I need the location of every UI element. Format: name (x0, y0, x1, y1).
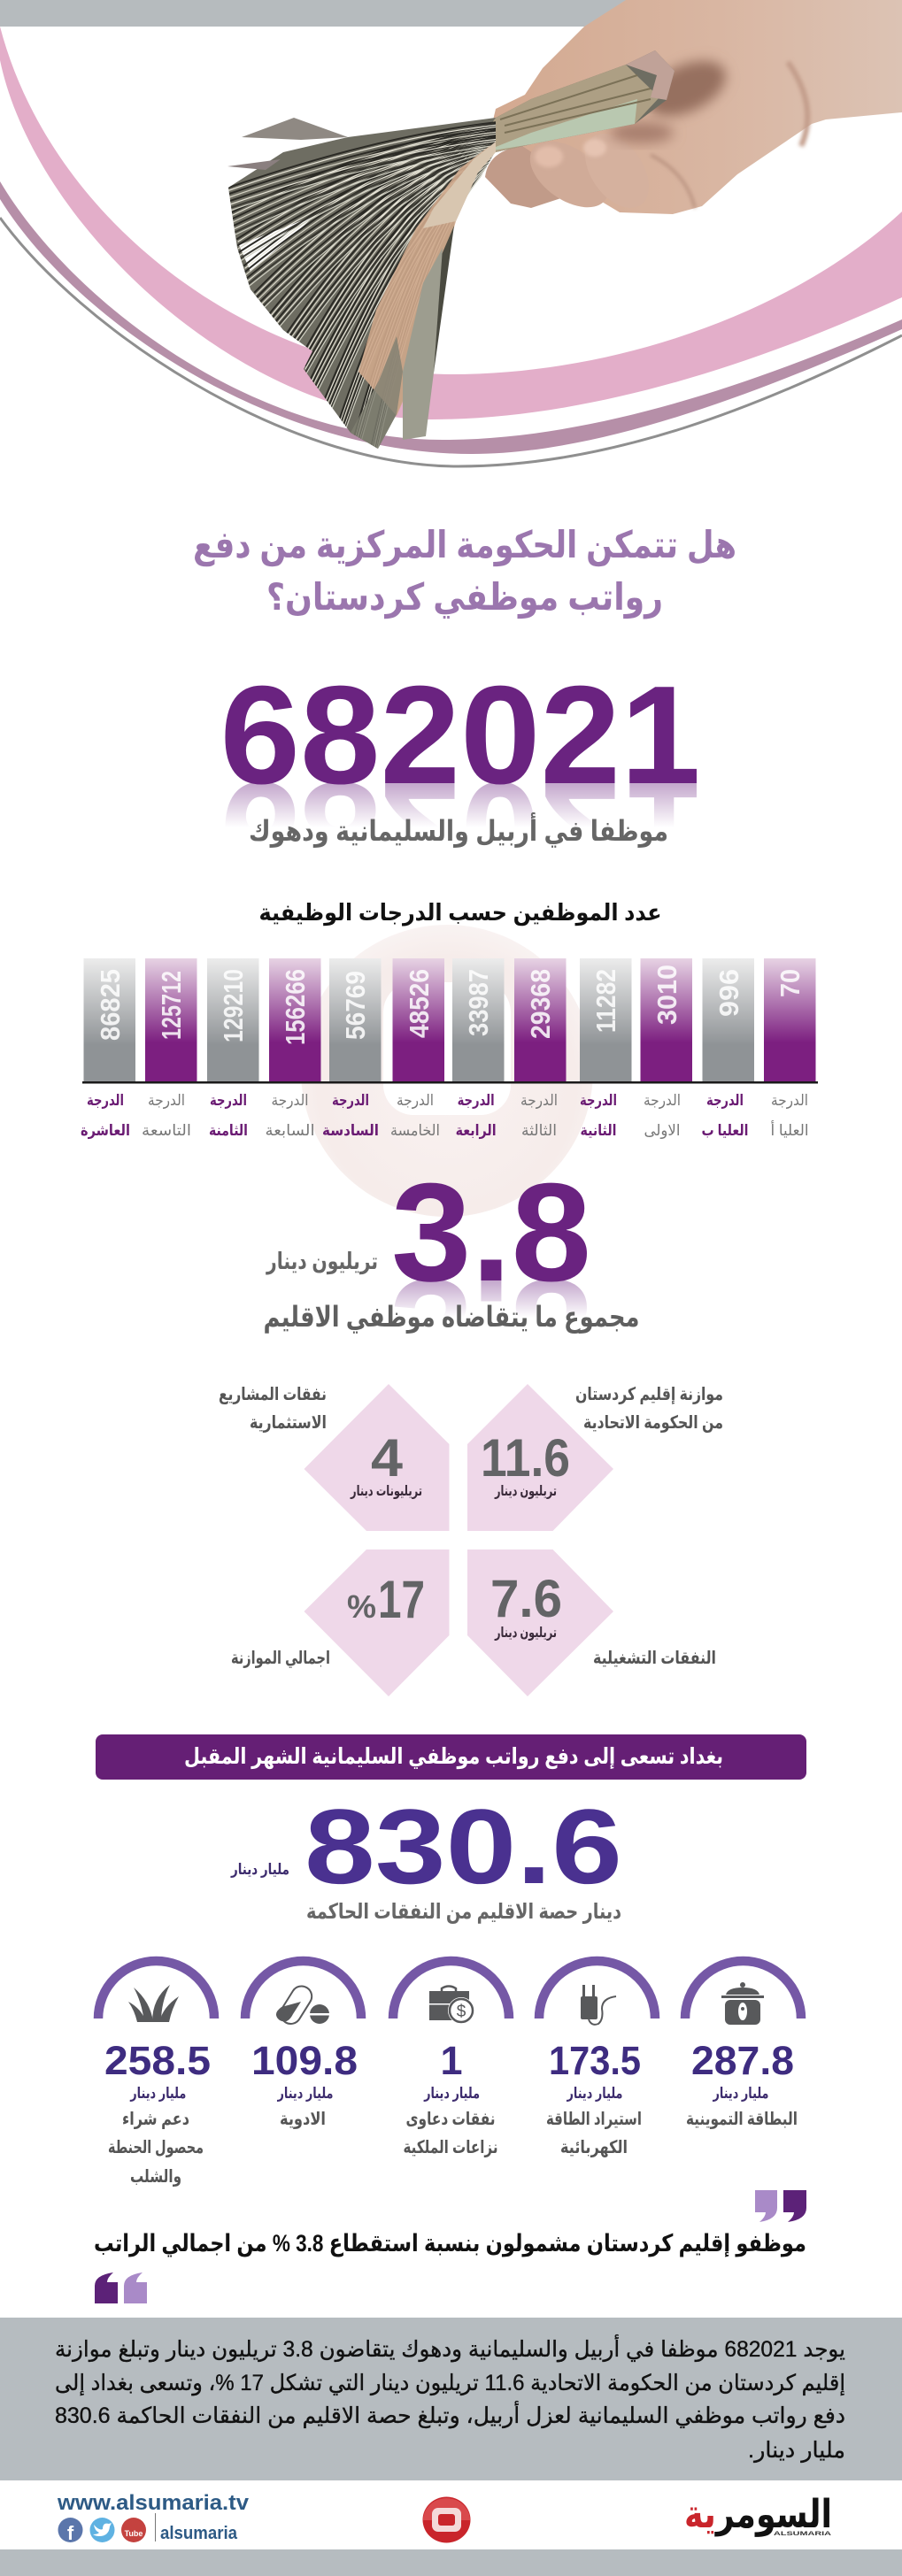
footer: website: www.alsumaria.tv (57, 2491, 250, 2515)
hand holding money (227, 0, 902, 467)
footer: social icons: alsumaria (160, 2524, 238, 2543)
watermark logo (301, 925, 593, 1217)
grade labels: الدرجة (644, 1092, 681, 1109)
footer: social icons (58, 2513, 238, 2544)
big number 682021 with reflection (220, 657, 701, 909)
grade labels: العاشرة (81, 1122, 130, 1140)
icon: money bag: $ (457, 2003, 466, 2021)
diamond: federal budget share: 11.6 (481, 1428, 570, 1488)
diamond: investment spending: تريليونات دينار (350, 1484, 422, 1499)
grade labels: العليا أ (770, 1120, 809, 1139)
bar chart: employees per grade: 86825 (95, 969, 126, 1041)
mauve curved band (0, 181, 902, 454)
item: property disputes: نزاعات الملكية (404, 2138, 497, 2157)
diamond: federal budget share: تريليون دينار (494, 1484, 557, 1499)
item: ration card: مليار دينار (713, 2085, 768, 2102)
title: رواتب موظفي كردستان؟ (266, 576, 663, 619)
subtitle: employees: موظفا في أربيل والسليمانية ودهوك (249, 812, 668, 848)
grade labels: الدرجة (87, 1092, 124, 1109)
item: wheat and barley: والشلب (130, 2167, 181, 2187)
footer: social icons: f (67, 2522, 74, 2544)
icon: money bag (429, 1986, 474, 2024)
bar chart: employees per grade: 11282 (590, 969, 621, 1033)
bar chart: employees per grade (82, 958, 818, 1083)
diamond: share of total budget: % (347, 1588, 376, 1625)
bar chart: employees per grade: 156266 (280, 969, 311, 1045)
footer: social icons: Tube (125, 2529, 143, 2538)
subtitle: total salaries: مجموع ما يتقاضاه موظفي الاقليم (264, 1301, 639, 1334)
diamond: share of total budget: 17 (378, 1570, 425, 1629)
bar chart: employees per grade: 56769 (340, 971, 371, 1040)
banner: Baghdad seeks to pay Sulaymaniyah salaries: بغداد تسعى إلى دفع رواتب موظفي السليمانية الشهر المقبل (184, 1744, 723, 1770)
item: ration card: 287.8 (691, 2038, 794, 2083)
grade labels: العليا ب (701, 1122, 749, 1139)
icon: closing quote marks (95, 2272, 147, 2303)
unit: billion dinars: مليار دينار (230, 1861, 289, 1878)
item: property disputes: مليار دينار (423, 2085, 480, 2102)
bar chart: employees per grade: 33987 (463, 969, 494, 1036)
grade labels: الاولى (644, 1122, 680, 1139)
item: medicine: 109.8 (251, 2038, 358, 2083)
big number 682021 with reflection: 682021 (220, 753, 701, 909)
grade labels: الدرجة (397, 1092, 434, 1109)
grade labels: الدرجة (271, 1092, 308, 1109)
quote: salary deduction: موظفو إقليم كردستان مشمولون بنسبة استقطاع 3.8 % من اجمالي الراتب (94, 2230, 806, 2257)
big number 3.8 with reflection: 3.8 (391, 1250, 591, 1406)
item: property disputes: نفقات دعاوى (405, 2110, 496, 2129)
item: electricity imports: 173.5 (549, 2038, 641, 2083)
grade labels: الدرجة (520, 1092, 558, 1109)
grade labels: الثالثة (521, 1122, 557, 1139)
item: medicine: الادوية (280, 2110, 326, 2129)
footer: Alsumaria wordmark: ALSUMARIA (774, 2531, 832, 2537)
item: wheat and barley: دعم شراء (122, 2110, 189, 2129)
grade labels: الدرجة (210, 1092, 247, 1109)
diamond: federal budget share (467, 1384, 613, 1531)
bar chart: employees per grade: 125712 (156, 971, 187, 1040)
grade labels: الدرجة (148, 1092, 185, 1109)
footer: red logo mark (423, 2497, 471, 2543)
bar chart: employees per grade: 70 (775, 969, 806, 997)
top grey bar (0, 0, 902, 27)
label: federal budget (575, 1385, 723, 1433)
item: electricity imports: الكهربائية (560, 2138, 628, 2157)
big number 830.6: 830.6 (305, 1788, 622, 1906)
grade labels: الرابعة (456, 1122, 497, 1140)
diamond: share of total budget (305, 1549, 450, 1696)
grade labels: السادسة (322, 1122, 379, 1139)
panel: summary paragraph (0, 2318, 902, 2480)
label: investment projects (219, 1385, 327, 1433)
label: federal budget: من الحكومة الاتحادية (583, 1413, 723, 1433)
bottom grey bar (0, 2549, 902, 2576)
subtitle: region's share of sovereign spending: دينار حصة الاقليم من النفقات الحاكمة (306, 1900, 621, 1924)
icon: cooking pot (721, 1982, 764, 2025)
grade labels: الدرجة (332, 1092, 369, 1109)
panel: summary paragraph: مليار دينار. (748, 2438, 845, 2463)
bar chart: employees per grade: 129210 (218, 969, 249, 1042)
item: electricity imports (539, 1961, 655, 2157)
bar chart: employees per grade: 996 (713, 969, 744, 1017)
money stack (227, 50, 675, 467)
diamond: operating spending (467, 1549, 613, 1696)
item: wheat and barley: مليار دينار (130, 2085, 186, 2102)
item: property disputes: 1 (440, 2038, 463, 2083)
item: electricity imports: مليار دينار (567, 2085, 623, 2102)
diamond: operating spending: 7.6 (490, 1569, 562, 1628)
big number 3.8 with reflection: 3.8 (391, 1155, 591, 1311)
pink curved band (0, 27, 902, 419)
big number 3.8 with reflection (391, 1155, 591, 1406)
label: investment projects: نفقات المشاريع (219, 1385, 327, 1404)
footer: Alsumaria wordmark: السومرية (684, 2493, 832, 2537)
panel: budget diamonds (305, 1384, 613, 1696)
bar chart: employees per grade: 3010 (651, 965, 682, 1025)
grade labels: الدرجة (706, 1092, 744, 1109)
label: investment projects: الاستثمارية (250, 1413, 327, 1433)
heading: employees by grade: عدد الموظفين حسب الدرجات الوظيفية (258, 899, 662, 927)
unit: trillion dinars: تريليون دينار (265, 1248, 378, 1275)
grade labels: الدرجة (771, 1092, 808, 1109)
grade labels: الثانية (581, 1122, 616, 1139)
panel: summary paragraph: يوجد 682021 موظفا في أربيل والسليمانية ودهوك يتقاضون 3.8 تريليون دينار وتبلغ موازنة (55, 2334, 845, 2363)
big number 682021 with reflection: 682021 (220, 657, 701, 813)
panel: summary paragraph: إقليم كردستان من الحكومة الاتحادية 11.6 تريليون دينار التي تشكل 17 %، وتسعى بغداد إلى (55, 2371, 845, 2396)
item: medicine (245, 1961, 361, 2129)
grade labels: الثامنة (209, 1122, 248, 1139)
item: ration card (685, 1961, 801, 2129)
item: ration card: البطاقة التموينية (686, 2110, 798, 2129)
item: wheat and barley: محصول الحنطة (108, 2138, 204, 2157)
item: electricity imports: استيراد الطاقة (546, 2110, 642, 2129)
label: total budget: اجمالي الموازنة (231, 1649, 330, 1669)
grade labels: التاسعة (142, 1122, 191, 1139)
item: wheat and barley (98, 1961, 214, 2187)
banner: Baghdad seeks to pay Sulaymaniyah salaries (96, 1734, 806, 1780)
item: medicine: مليار دينار (277, 2085, 333, 2102)
grade labels: الخامسة (390, 1122, 440, 1139)
title: هل تتمكن الحكومة المركزية من دفع (193, 524, 736, 567)
grade labels: السابعة (266, 1122, 315, 1139)
item: property disputes (393, 1961, 509, 2157)
grade labels (81, 1092, 809, 1140)
diamond: investment spending (305, 1384, 450, 1531)
bar chart: employees per grade: 29368 (525, 969, 556, 1039)
label: federal budget: موازنة إقليم كردستان (575, 1385, 723, 1404)
diamond: operating spending: تريليون دينار (494, 1626, 557, 1641)
label: operating spending: النفقات التشغيلية (593, 1649, 716, 1668)
icon: opening quote marks (755, 2190, 806, 2222)
title (193, 524, 736, 619)
icon: grass (128, 1985, 179, 2022)
grade labels: الدرجة (580, 1092, 617, 1109)
grade labels: الدرجة (458, 1092, 495, 1109)
panel: summary paragraph: دفع رواتب موظفي السليمانية لعزل أربيل، وتبلغ حصة الاقليم من النفقات الحاكمة 830.6 (55, 2400, 845, 2429)
diamond: investment spending: 4 (371, 1428, 404, 1488)
bar chart: employees per grade: 48526 (404, 969, 435, 1038)
icon: plug (581, 1985, 616, 2025)
item: wheat and barley: 258.5 (104, 2038, 211, 2083)
grey curved line (0, 218, 902, 466)
icon: pills (276, 1982, 330, 2027)
